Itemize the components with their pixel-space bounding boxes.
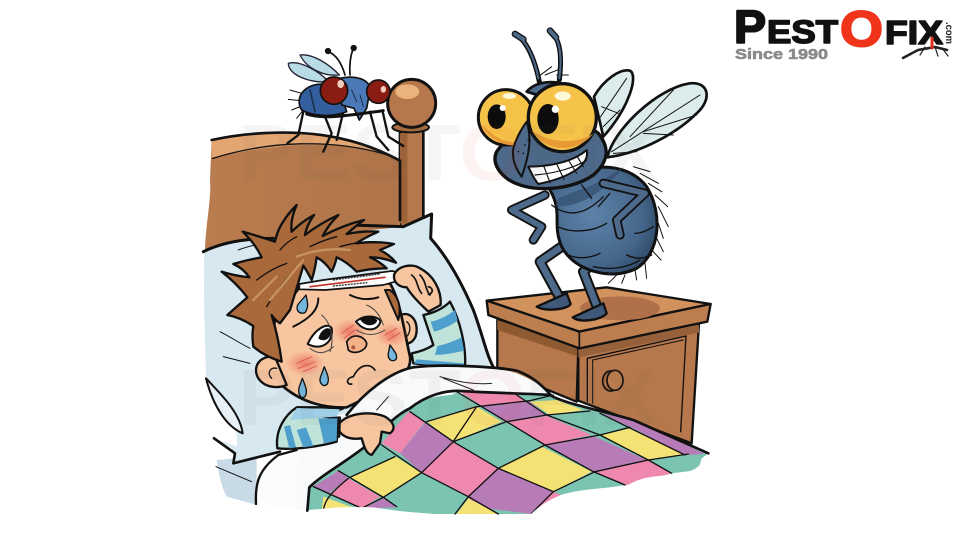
wings xyxy=(594,70,707,157)
mouth xyxy=(347,366,375,384)
logo mosquito icon xyxy=(903,38,948,58)
quilt outline xyxy=(307,391,708,511)
lower pillow corner xyxy=(206,378,243,433)
quilt patches xyxy=(313,392,705,514)
ear right xyxy=(398,314,417,344)
bristles xyxy=(288,90,303,118)
quilt stitching xyxy=(313,392,688,514)
hair xyxy=(222,205,396,362)
head xyxy=(495,123,606,189)
arms on the hips xyxy=(512,183,645,240)
blanket and quilt xyxy=(297,366,720,527)
white sheet edge xyxy=(256,440,363,512)
antennae xyxy=(326,46,356,75)
hand gripping blanket xyxy=(337,413,394,455)
thermometer xyxy=(299,271,403,290)
logo: Pestofix: FIX xyxy=(885,14,943,51)
logo: Pestofix xyxy=(734,1,954,63)
eyes xyxy=(478,90,534,145)
white sheet folded over xyxy=(297,366,552,510)
ear left xyxy=(256,357,287,387)
beak xyxy=(513,122,529,177)
small red-eyed fly on headboard xyxy=(287,46,403,152)
knob xyxy=(603,371,619,391)
sick boy xyxy=(222,205,465,407)
abdomen xyxy=(550,167,657,274)
logo: Pestofix: EST xyxy=(767,14,839,50)
blushing cheeks xyxy=(285,351,325,376)
raised hand xyxy=(394,266,441,312)
raised arm with pyjama sleeve xyxy=(412,302,465,368)
bed pillows xyxy=(203,214,495,512)
wavy white lower edge of quilt xyxy=(300,457,720,527)
big grinning fly on nightstand xyxy=(478,31,707,320)
grin xyxy=(528,150,587,184)
eyebrows, eyes and wrinkles xyxy=(293,298,318,327)
faint watermarks: PESTOFIX xyxy=(238,353,658,442)
main pillow xyxy=(204,214,490,465)
quilt base xyxy=(308,394,708,514)
faint watermarks: PESTOFIX xyxy=(238,108,658,197)
logo: Pestofix: P xyxy=(734,1,766,53)
legs xyxy=(287,108,403,152)
face xyxy=(273,283,410,407)
back legs xyxy=(540,247,603,310)
nightstand xyxy=(487,287,711,443)
drawer door xyxy=(587,336,686,432)
eyes xyxy=(320,77,348,104)
antennae xyxy=(515,31,561,82)
bristles xyxy=(538,67,668,283)
lower sleeve xyxy=(277,407,343,449)
logo: Pestofix: .com xyxy=(943,22,954,44)
headboard xyxy=(205,79,436,253)
body xyxy=(299,84,347,115)
logo: Pestofix: Since 1990 xyxy=(735,46,828,63)
logo: Pestofix: O xyxy=(840,1,883,57)
tears and sweat drops xyxy=(297,295,397,398)
stain on the top xyxy=(580,296,660,320)
nose xyxy=(347,336,367,352)
faint watermarks xyxy=(238,108,658,442)
sheet shadow under the bed xyxy=(217,457,257,505)
wings xyxy=(288,55,339,82)
